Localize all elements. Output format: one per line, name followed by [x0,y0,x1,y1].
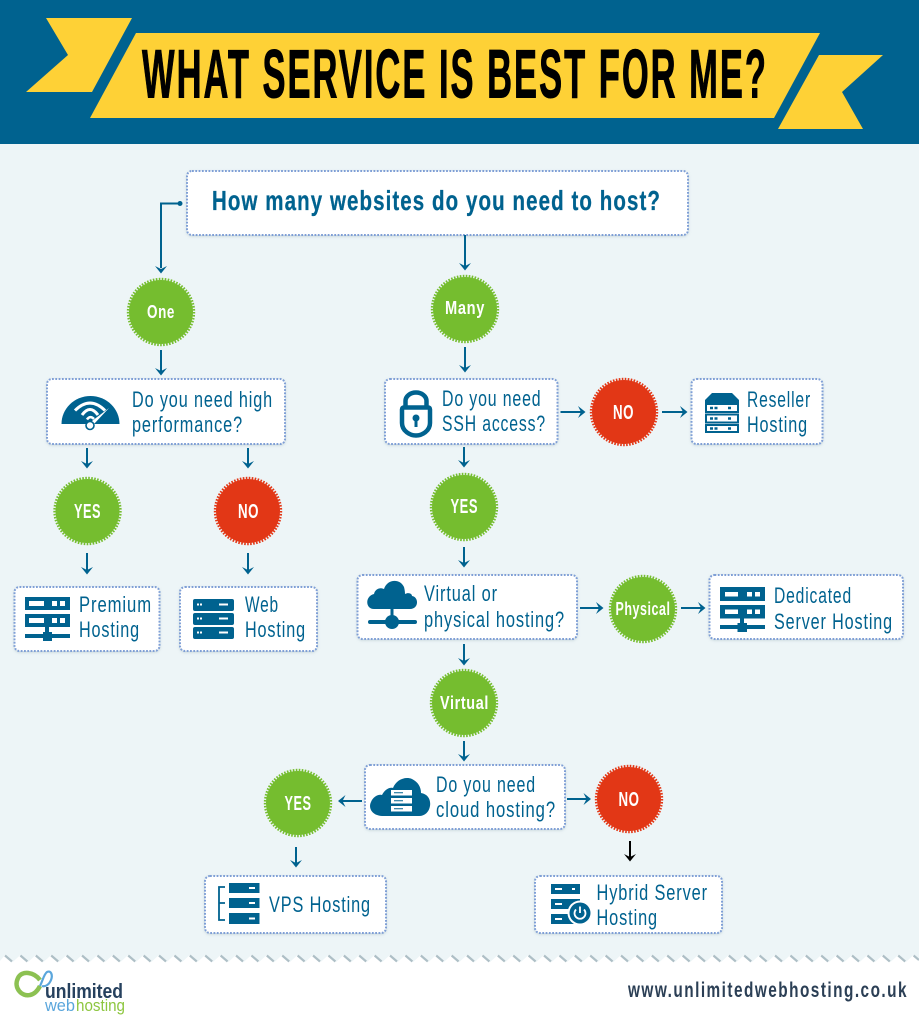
panel: high performance question [47,379,285,444]
circle: virtual [431,670,497,736]
arrow: physical to dedicated [681,602,706,614]
icon: cloud server [370,778,430,816]
panel: hybrid server hosting [535,876,722,933]
icon: reseller server rack [705,393,739,432]
arrow: virtual to cloud question [458,741,470,762]
arrow: SSH to yes [458,447,470,468]
panel: web hosting [180,587,317,651]
panel: cloud hosting question [365,765,565,829]
panel: dedicated server hosting [710,575,903,639]
panel: virtual or physical question: physical hosting? [424,607,565,632]
icon: premium server [25,597,70,641]
panel: web hosting: Hosting [245,617,306,642]
circle: Many [432,276,498,342]
circle: virtual: Virtual [440,693,489,713]
panel: reseller hosting: Hosting [747,412,808,437]
panel: virtual or physical question [358,575,577,639]
circle: physical: Physical [616,599,670,619]
header banner [0,0,919,144]
circle: no (performance) [215,478,281,544]
question: how many websites: How many websites do you need to host? [212,185,661,216]
arrow: no to reseller [662,406,688,418]
label: Dedicated [774,583,852,608]
circle: Many: Many [445,298,485,318]
panel: high performance question: performance? [132,412,243,437]
label: Reseller [747,387,811,412]
circle: yes (performance): YES [74,501,101,523]
logo: unlimited web hosting: hosting [76,996,125,1015]
arrow: performance to no [242,448,254,468]
logo mark [17,972,52,995]
icon: web server [193,599,234,639]
arrow: virtual question to physical [580,602,604,614]
circle: no (cloud): NO [618,789,640,811]
circle: no (cloud) [596,766,662,832]
circle: One: One [147,302,175,322]
arrow: yes to virtual question [458,547,470,568]
arrow: SSH to no [560,406,586,418]
question text: Do you need [442,386,542,411]
circle: yes (cloud): YES [284,793,312,815]
panel: SSH question [385,379,558,444]
question text: Virtual or [424,581,498,606]
footer band [0,955,919,1024]
circle: One [128,279,194,345]
label: Premium [79,592,152,617]
arrow: Many to SSH [459,347,471,372]
icon: dedicated server [720,587,765,632]
arrow: to Many [459,235,471,270]
circle: no (performance): NO [238,501,259,523]
arrow: One to performance [155,350,167,376]
icon: VPS server stack [219,883,260,924]
logo: unlimited web hosting [17,972,125,1015]
panel: reseller hosting [692,379,822,444]
question text: Do you need [436,772,536,797]
label: VPS Hosting [269,892,371,917]
ribbon left tail [26,18,132,92]
question: how many websites [187,171,688,235]
icon: cloud network [367,581,417,629]
arrow: yes to VPS [290,847,302,868]
panel: hybrid server hosting: Hosting [596,905,658,930]
panel: SSH question: SSH access? [442,411,546,436]
circle: yes (SSH) [431,474,497,540]
arrow: cloud question to no [567,793,591,805]
circle: no (SSH): NO [613,402,634,424]
panel: premium hosting [14,587,160,651]
arrow: yes to premium [81,553,93,574]
circle: physical [610,576,676,642]
icon: hybrid server with power button [551,884,592,926]
logo: unlimited web hosting: web [44,996,75,1015]
circle: no (SSH) [591,379,657,445]
arrow: to One [155,201,182,274]
circle: yes (performance) [54,478,120,544]
arrow: performance to yes [81,448,93,468]
arrow: no to web [242,553,254,574]
ribbon main [90,33,820,118]
panel: premium hosting: Hosting [79,617,140,642]
panel: cloud hosting question: cloud hosting? [436,797,556,822]
question text: Do you need high [132,387,273,412]
label: Web [245,592,279,617]
panel: VPS hosting [205,876,386,933]
circle: yes (cloud) [265,770,331,836]
icon: speed gauge wifi [62,396,120,430]
logo wordmark: unlimited [45,981,123,1003]
arrow: virtual question to virtual [458,644,470,666]
arrow: no to hybrid [624,841,636,862]
circle: yes (SSH): YES [450,496,478,518]
icon: padlock [402,392,430,436]
arrow: cloud question to yes [338,795,362,807]
ribbon right tail [778,55,883,129]
label: Hybrid Server [596,880,708,905]
